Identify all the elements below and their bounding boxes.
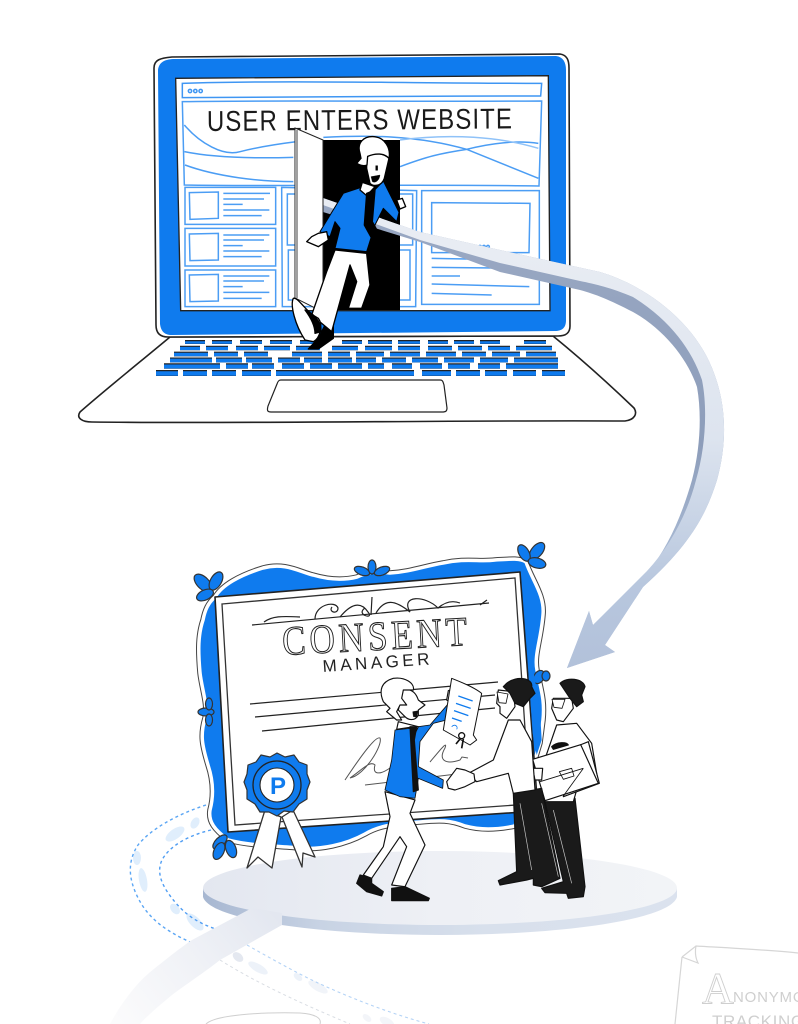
- neck and collar: [360, 182, 375, 196]
- blue man: shoes: [357, 875, 429, 901]
- arrow: laptop to consent manager: [323, 198, 724, 668]
- faint oval at bottom: [206, 1013, 320, 1024]
- signature: [345, 738, 490, 785]
- arrow side shade: [323, 198, 724, 668]
- blue man: tie: [410, 727, 418, 792]
- tie: [364, 190, 383, 255]
- person middle: trousers: [498, 788, 560, 887]
- frame strip behind people: [528, 670, 542, 755]
- certificate board: [215, 572, 538, 832]
- arrow top surface and head: [323, 198, 724, 668]
- laptop base: [79, 336, 636, 423]
- leg shadow on laptop: [308, 310, 333, 349]
- person right: trousers: [542, 798, 585, 898]
- blue man: back trousers: [363, 792, 425, 887]
- person middle: shirt: [468, 720, 535, 793]
- outer dashed line: [130, 805, 206, 942]
- folder clip and clasp: [552, 743, 568, 749]
- signed scroll: [443, 678, 482, 748]
- ribbon tails: [247, 810, 315, 868]
- document title text: A: [702, 964, 734, 1013]
- heading: consent: CONSENT: [281, 609, 468, 665]
- trouser highlights: [520, 803, 572, 883]
- middle column cards: [282, 187, 417, 307]
- person middle: face: [497, 690, 515, 718]
- shoe: [292, 298, 321, 342]
- fading arrow leaving platform: [110, 908, 282, 1024]
- trousers: [312, 250, 370, 332]
- handshake: [447, 768, 475, 790]
- screen bezel: [158, 56, 566, 335]
- browser address bar: [182, 82, 542, 98]
- consent manager certificate: [191, 540, 550, 868]
- heading: user enters website: USER ENTERS WEBSITE: [207, 102, 512, 138]
- laptop: [79, 54, 636, 423]
- faded dashed line upper: [247, 945, 429, 1024]
- person right: folder: [533, 745, 598, 801]
- face: [367, 154, 389, 185]
- left column cards: [185, 187, 276, 307]
- scroll seal: [459, 733, 465, 739]
- blue man: face: [398, 689, 425, 720]
- subheading: manager: MANAGER: [322, 650, 430, 676]
- jacket: [320, 181, 399, 252]
- inner dashed line: [160, 830, 247, 945]
- person right: hair: [560, 679, 585, 707]
- hero block with waves: [182, 101, 542, 186]
- doorway: [323, 140, 400, 310]
- laptop lid: [154, 54, 570, 337]
- three people shaking hands: [357, 670, 599, 901]
- faded dashed line lower: [220, 960, 350, 1024]
- footprints: [133, 816, 396, 1024]
- platform disk: [203, 851, 677, 935]
- keyboard: [156, 342, 565, 374]
- screen background: [176, 76, 550, 311]
- dashed path with footprints: [130, 805, 429, 1024]
- person right: back page: [563, 742, 599, 797]
- ornate frame: [199, 559, 544, 848]
- rosette seal: [244, 753, 310, 816]
- man entering through door: [292, 137, 406, 349]
- frame flourishes: [191, 540, 550, 861]
- right column card: [422, 191, 539, 304]
- door panel: [295, 128, 323, 312]
- rosette letter P: P: [270, 773, 286, 800]
- left hand: [307, 232, 328, 247]
- award rosette: [244, 753, 315, 868]
- text lines on certificate: [250, 682, 498, 731]
- blue man: mouth: [413, 711, 418, 717]
- person middle: glasses: [497, 692, 508, 703]
- trackpad: [267, 380, 447, 412]
- anonymous tracking document (faded): [675, 946, 798, 1024]
- person middle: hair: [503, 679, 535, 707]
- screen wireframe: [176, 76, 550, 311]
- mouth and eye: [371, 166, 380, 182]
- person right: shirt: [540, 723, 598, 802]
- ornament above title: [252, 597, 489, 625]
- certificate inner border: [222, 578, 530, 825]
- hair: [357, 137, 389, 166]
- person right: hand: [533, 768, 543, 780]
- right hand: [397, 198, 406, 209]
- person right: glasses: [552, 699, 565, 708]
- blue man: hair: [381, 678, 414, 720]
- person right: face: [552, 698, 573, 722]
- blue man: jacket: [385, 702, 450, 798]
- rosette centre: [260, 768, 294, 802]
- rosette ring: [253, 761, 301, 809]
- blue man: hand on scroll: [447, 688, 458, 703]
- blue man: collar: [397, 722, 418, 733]
